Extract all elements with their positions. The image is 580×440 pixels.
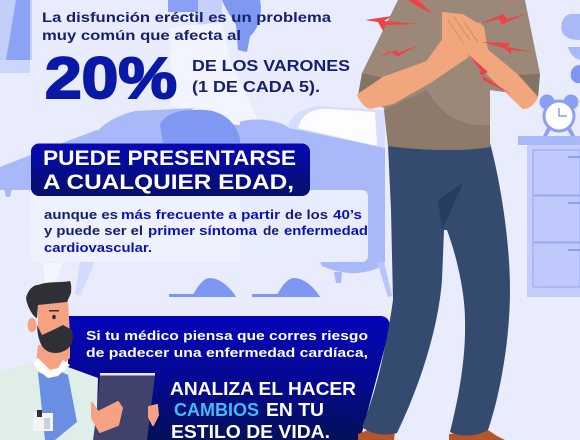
body text: age: aunque es: [44, 207, 118, 222]
advice text: [86, 328, 368, 360]
intro text: La disfunción eréctil es un problema: [42, 9, 331, 25]
heading: any age: [31, 144, 310, 196]
shirt: [358, 0, 540, 150]
dresser: [518, 136, 580, 297]
statistic label: DE LOS VARONES: [192, 58, 350, 75]
vest: [38, 370, 77, 440]
arms: [358, 13, 537, 108]
icon: alarm clock: [540, 94, 578, 136]
sleeves: [358, 73, 540, 98]
hair: [26, 281, 71, 318]
icon: pain bolts: [365, 0, 534, 94]
hand lines: [448, 17, 478, 44]
pants shadow: [438, 183, 463, 230]
call to action: [170, 379, 356, 440]
call to action: ANALIZA EL HACER: [170, 379, 356, 399]
advice text: Si tu médico piensa que corres riesgo: [86, 328, 368, 343]
body text: age: enfermedad: [284, 223, 368, 238]
intro text: [42, 9, 331, 43]
intro text: muy común que afecta al: [42, 27, 241, 43]
statistic label: (1 DE CADA 5).: [192, 79, 320, 96]
call to action: CAMBIOS: [174, 400, 259, 420]
body text: age: de los: [285, 207, 328, 222]
body text: age: primer síntoma: [148, 223, 258, 238]
statistic: 20%: 20%: [45, 46, 177, 111]
collar: [33, 358, 70, 378]
heading: any age: A CUALQUIER EDAD,: [43, 170, 294, 194]
shelf objects: [561, 14, 580, 83]
background bedroom scene: [0, 0, 392, 297]
panel: age text backdrop: [30, 190, 368, 262]
body text: age: más frecuente a partir: [121, 207, 280, 222]
shirt shadow: [384, 90, 490, 150]
icon: slippers: [169, 278, 320, 297]
ear: [28, 318, 36, 332]
clipboard: [93, 374, 155, 440]
figure: doctor: [0, 281, 158, 440]
eye and brow: [49, 310, 59, 319]
hands: [92, 402, 158, 432]
pants: [362, 143, 510, 436]
face: [38, 300, 70, 335]
figure: man holding chest: [358, 0, 540, 440]
beard: [37, 325, 73, 353]
body text: age: [44, 207, 368, 255]
statistic label: [192, 58, 350, 96]
body text: age: y puede ser el: [44, 223, 143, 238]
body text: age: cardiovascular.: [44, 240, 152, 255]
advice text: de padecer una enfermedad cardíaca,: [86, 345, 368, 360]
body text: age: 40’s: [333, 207, 362, 222]
call to action: EN TU: [266, 400, 324, 420]
heading: any age: PUEDE PRESENTARSE: [43, 146, 296, 170]
body text: age: de: [263, 223, 279, 238]
shoes: [358, 430, 505, 440]
panel: doctor advice: [68, 316, 390, 440]
badge: [33, 410, 53, 431]
neck: [36, 345, 70, 376]
coat: [0, 362, 100, 440]
